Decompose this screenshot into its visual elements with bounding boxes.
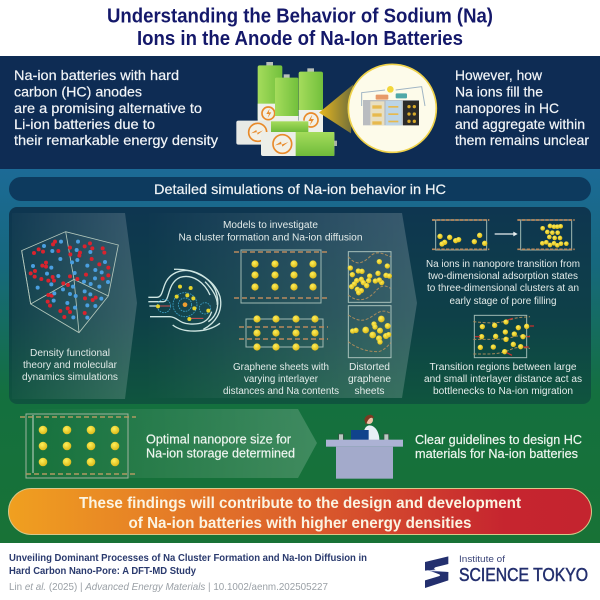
panel: footer [0, 543, 600, 600]
heading: detailed simulations pill: Detailed simulations of Na-ion behavior in HC [154, 181, 446, 197]
arrow: 2D to 3D [495, 232, 518, 236]
icon: lying battery front [261, 132, 337, 156]
text: introduction right: nanopores in HC [455, 100, 559, 116]
text: density functional theory: Density functional [30, 348, 110, 359]
icon: magnified cell circle [348, 64, 436, 152]
text: models heading: Models to investigate [223, 220, 318, 231]
icon: back left battery [258, 62, 282, 124]
panel: simulation gradient background [0, 169, 600, 543]
icon: laptop [351, 430, 369, 441]
icon: cluster swirl diagram [148, 269, 221, 331]
title [107, 6, 493, 50]
text: distorted sheets caption [348, 362, 391, 397]
chart: molecular dynamics cube [22, 232, 118, 333]
chart: distorted sheet upper [348, 252, 392, 302]
icon: researcher at desk [326, 415, 403, 479]
callout: conclusion banner: These findings will contribute to the design and development [79, 495, 522, 512]
panel: simulations [9, 207, 591, 404]
text: graphene sheets caption: varying interlayer [244, 374, 319, 385]
chart: distorted sheet lower [348, 306, 391, 358]
icon: Science Tokyo logo [425, 556, 448, 588]
panel: introduction band [0, 56, 600, 169]
text: bottleneck caption [424, 362, 582, 397]
text: 2D to 3D caption: early stage of pore filling [450, 296, 556, 307]
text: density functional theory: theory and molecular [23, 360, 118, 371]
callout: conclusion banner: of Na-ion batteries with higher energy densities [128, 515, 472, 532]
text: 2D to 3D caption: two-dimensional adsorption states [428, 271, 578, 282]
text: distorted sheets caption: sheets [354, 386, 384, 397]
text: models heading [178, 220, 362, 244]
icon: flasks [339, 434, 389, 441]
arrow: molecular dynamics step [12, 213, 137, 399]
red atoms [29, 240, 110, 319]
text: optimal nanopore size: Optimal nanopore size for [146, 432, 291, 446]
text: introduction right [455, 67, 589, 148]
text: graphene sheets caption: Graphene sheets with [233, 362, 329, 373]
icon: middle battery [275, 74, 298, 123]
callout: conclusion banner [8, 488, 592, 534]
icon: desk top [326, 440, 403, 447]
text: graphene sheets caption: distances and Na contents [223, 386, 339, 397]
text: clear guidelines: Clear guidelines to design HC [415, 433, 582, 447]
icon: magnifier cone [319, 84, 353, 133]
text: clear guidelines: materials for Na-ion batteries [415, 447, 578, 461]
text: paper title: Hard Carbon Nano-Pore: A DFT-MD Study [9, 565, 196, 577]
text: introduction right: them remains unclear [455, 132, 589, 148]
text: bottleneck caption: and small interlayer distance act as [424, 374, 582, 385]
text: Institute of Science Tokyo [459, 554, 588, 585]
icon: back right battery [299, 68, 323, 132]
text: distorted sheets caption: Distorted [349, 362, 390, 373]
text: Institute of Science Tokyo: Institute of [459, 554, 505, 565]
text: 2D to 3D caption: Na ions in nanopore transition from [426, 259, 580, 270]
title: Understanding the Behavior of Sodium (Na) [107, 6, 493, 28]
arrow: optimal nanopore step [20, 409, 317, 478]
chart: wide interlayer graphene model [234, 250, 328, 303]
text: density functional theory: dynamics simulations [22, 372, 118, 383]
text: introduction left: their remarkable energy density [14, 132, 218, 148]
text: paper title: Unveiling Dominant Processes of Na Cluster Formation and Na-Ion Diffusion in [9, 552, 367, 564]
arrow: models step [145, 213, 417, 398]
text: graphene sheets caption [223, 362, 339, 397]
text: 2D to 3D caption: to three-dimensional clusters at an [427, 283, 579, 294]
text: bottleneck caption: bottlenecks to Na-ion migration [433, 386, 573, 397]
text: clear guidelines [415, 433, 582, 461]
text: bottleneck caption: Transition regions between large [430, 362, 577, 373]
chart: 2D to 3D transition [432, 220, 575, 250]
text: introduction left: Li-ion batteries due to [14, 116, 155, 132]
text: 2D to 3D caption [426, 259, 580, 307]
text: introduction right: However, how [455, 67, 543, 83]
text: models heading: Na cluster formation and Na-ion diffusion [178, 232, 362, 244]
chart: optimal nanopore model [20, 414, 136, 478]
text: introduction left: Na-ion batteries with hard [14, 67, 179, 83]
text: introduction right: and aggregate within [455, 116, 585, 132]
text: optimal nanopore size [146, 432, 295, 460]
icon: researcher [363, 415, 379, 440]
text: introduction left [14, 67, 218, 148]
chart: distorted graphene sheets [348, 252, 392, 358]
text: introduction left: carbon (HC) anodes [14, 84, 142, 100]
text: density functional theory [22, 348, 118, 383]
icon: lying battery rear [236, 121, 308, 145]
blue atoms [31, 240, 110, 320]
text: citation: Lin et al. (2025) | Advanced Energy Materials | 10.1002/aenm.202505227 [9, 581, 328, 593]
chart: narrow interlayer graphene model [239, 315, 328, 351]
header background [0, 0, 600, 56]
chart: bottleneck migration model [473, 315, 534, 358]
text: paper title [9, 552, 367, 577]
text: introduction left: are a promising alternative to [14, 100, 202, 116]
text: distorted sheets caption: graphene [348, 374, 391, 385]
chart: 2D adsorption state [432, 220, 489, 250]
text: introduction right: Na ions fill the [455, 84, 543, 100]
text: optimal nanopore size: Na-ion storage determined [146, 446, 295, 460]
title: Ions in the Anode of Na-Ion Batteries [137, 28, 463, 50]
heading: detailed simulations pill [9, 177, 591, 201]
chart: 3D cluster state [517, 220, 575, 250]
icon: desk body [336, 447, 393, 479]
icon: batteries with magnified cell [236, 62, 436, 156]
